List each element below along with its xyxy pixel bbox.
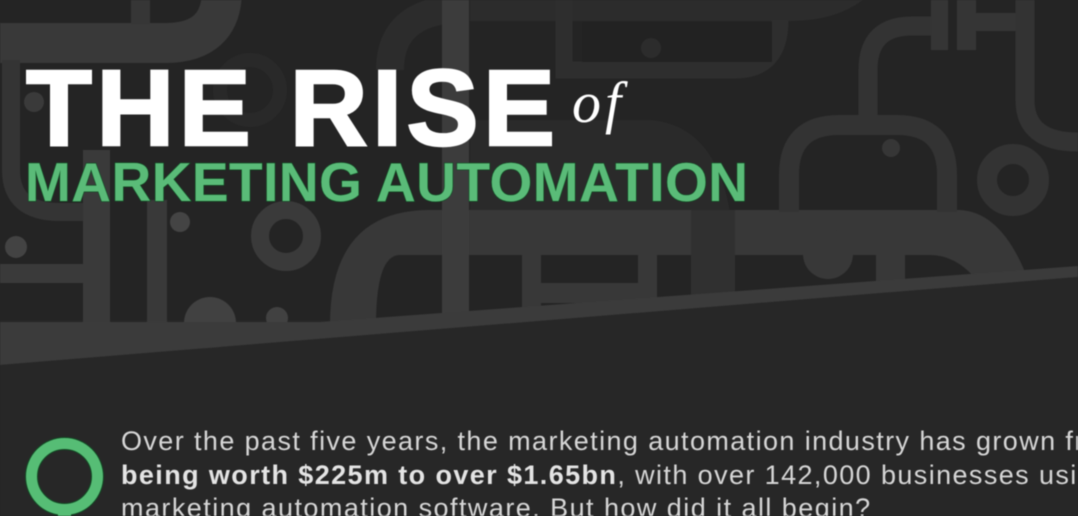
- title: THE RISE of: of: [572, 70, 628, 135]
- title: THE RISE of: THE RISE: [26, 47, 555, 168]
- diagonal divider band: [0, 266, 1078, 365]
- background pipe pattern: [0, 0, 1078, 349]
- lower section background: [0, 277, 1078, 516]
- icon: green ring marker: [32, 444, 98, 516]
- subtitle: MARKETING AUTOMATION: MARKETING AUTOMATION: [25, 151, 748, 213]
- intro paragraph: [121, 426, 1078, 516]
